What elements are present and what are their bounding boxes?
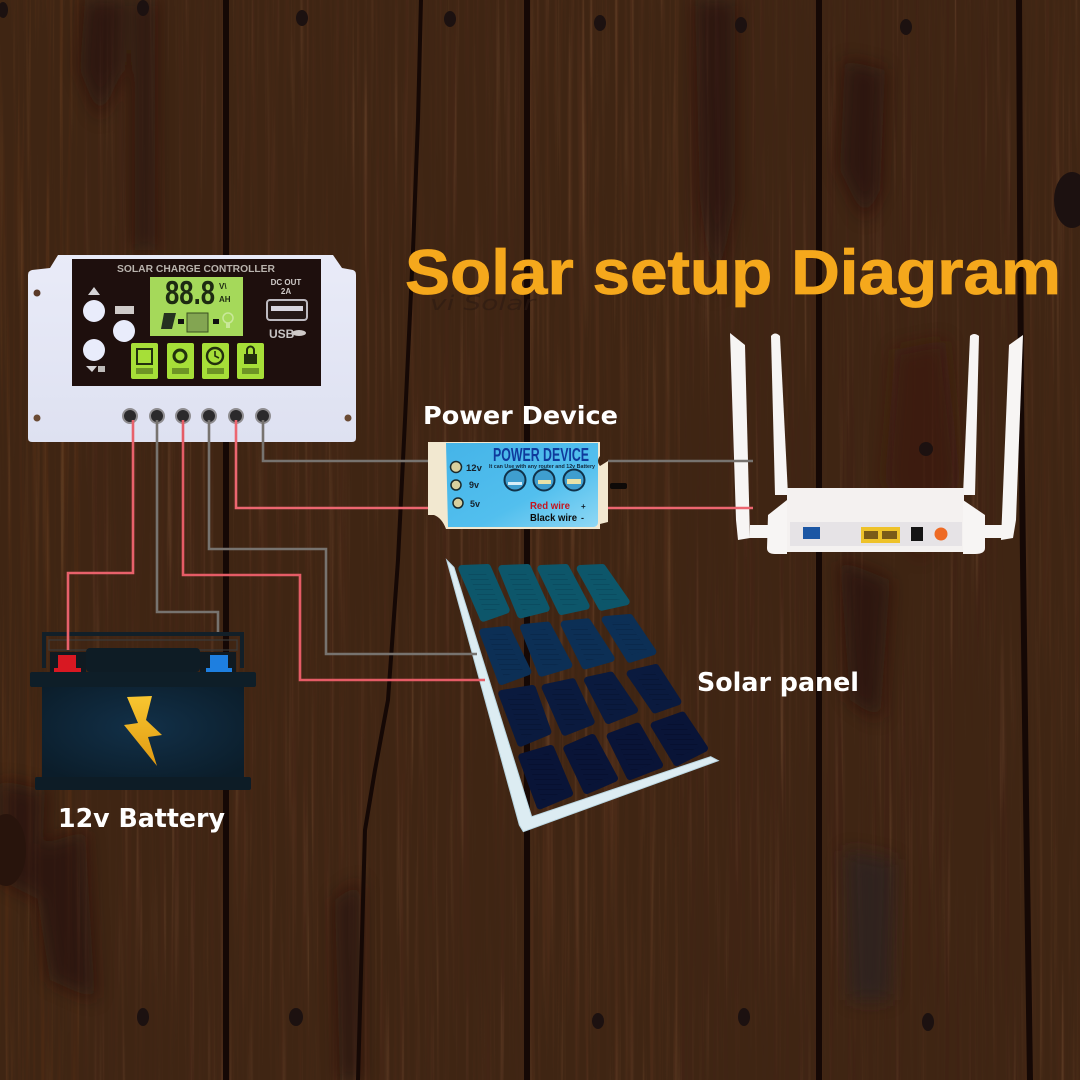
USB output: USB xyxy=(269,327,295,341)
USB output xyxy=(267,278,307,341)
solar panel xyxy=(447,560,718,832)
positive terminal xyxy=(54,655,81,672)
panel frame xyxy=(447,560,718,832)
controller body xyxy=(28,255,356,442)
screw terminals xyxy=(123,409,270,423)
car battery xyxy=(30,634,256,790)
power device module xyxy=(428,442,627,529)
module heading: POWER DEVICE xyxy=(493,445,589,465)
voltage selectors: 5v xyxy=(470,499,480,509)
solar charge controller xyxy=(28,255,356,442)
label: power device: Power Device xyxy=(423,401,618,430)
label: battery: 12v Battery xyxy=(58,804,225,834)
wire: load positive xyxy=(236,420,753,508)
voltage selectors: 12v xyxy=(466,463,483,474)
power device module: - xyxy=(581,513,584,523)
cell row 4 xyxy=(522,715,704,806)
LCD display: V\ xyxy=(219,282,227,291)
module subtitle: It can Use with any router and 12v Battery xyxy=(489,464,596,470)
router body xyxy=(787,488,964,552)
USB output: 2A xyxy=(281,287,291,296)
wire: battery positive xyxy=(68,420,133,650)
carry handle xyxy=(44,634,242,668)
title: Solar setup Diagram xyxy=(405,238,1061,308)
indicator rings xyxy=(504,470,584,490)
cell row 1 xyxy=(462,568,626,618)
cell row 3 xyxy=(502,668,678,743)
LCD display: AH xyxy=(219,295,231,304)
wire legend: Red wire xyxy=(530,500,570,512)
connection wires xyxy=(68,420,753,680)
lightning bolt xyxy=(124,696,162,766)
wire: battery negative xyxy=(157,420,218,632)
LCD display xyxy=(150,274,243,336)
voltage selectors xyxy=(450,462,483,509)
battery case xyxy=(42,684,244,780)
label: solar panel: Solar panel xyxy=(697,668,859,698)
router ports xyxy=(803,527,820,539)
ghost watermark text: vi Solar xyxy=(430,291,537,315)
wire: load negative xyxy=(263,420,753,461)
mode keys xyxy=(131,343,264,379)
wire: solar positive xyxy=(183,420,485,680)
USB output: DC OUT xyxy=(271,278,301,287)
antennas xyxy=(730,333,750,540)
voltage selectors: 9v xyxy=(469,480,479,490)
power device module: Black wire xyxy=(530,512,577,524)
wire: solar negative xyxy=(209,420,477,654)
LCD display: 88.8 xyxy=(165,274,215,311)
cell row 2 xyxy=(483,618,653,681)
power device module: + xyxy=(581,502,586,511)
router xyxy=(730,333,1023,554)
control buttons xyxy=(83,287,135,372)
controller heading: SOLAR CHARGE CONTROLLER xyxy=(117,264,276,275)
controller front panel xyxy=(72,259,321,386)
plank gaps xyxy=(226,0,1030,1080)
negative terminal xyxy=(206,655,232,672)
